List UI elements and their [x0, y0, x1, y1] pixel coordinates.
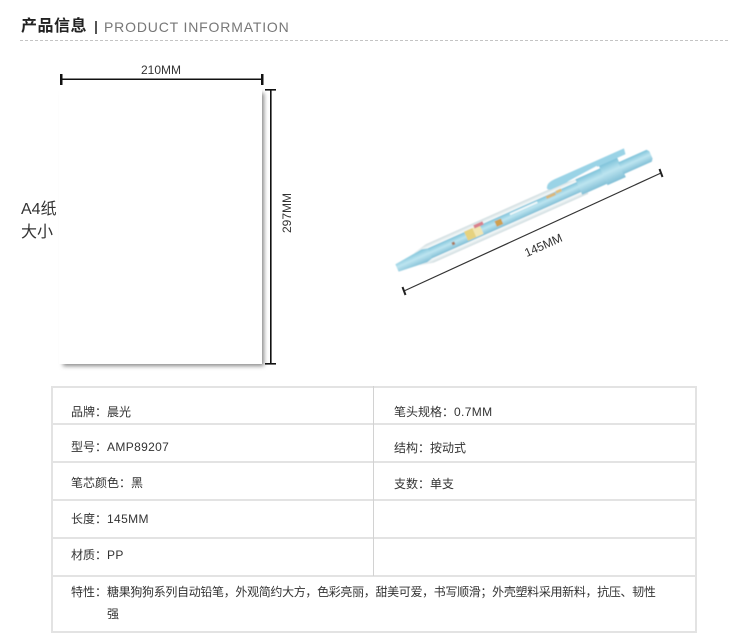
heading: dashed divider [20, 40, 728, 41]
illustration: mechanical pencil with length [395, 148, 664, 296]
width dimension line [60, 74, 264, 85]
heading: separator bar [95, 21, 97, 34]
clear barrel [413, 175, 588, 268]
collar [599, 158, 626, 185]
spec: refill colour: 笔芯颜色：黑 [71, 474, 143, 491]
label: A4 paper size [21, 200, 57, 241]
illustration: A4 paper with dimensions [60, 63, 294, 369]
height label: 297MM [280, 193, 294, 233]
spec: tip size: 笔头规格：0.7MM [394, 403, 492, 420]
spec: features: 特性：糖果狗狗系列自动铅笔，外观简约大方，色彩亮丽，甜美可爱，书写顺滑；外壳塑料采用新料，抗压、韧性 [71, 583, 656, 600]
width label: 210MM [141, 63, 181, 77]
upper body [575, 168, 608, 195]
tip [394, 247, 433, 274]
heading: product information [20, 17, 728, 41]
clip window [566, 166, 598, 183]
spec: quantity: 支数：单支 [394, 475, 454, 492]
barrel pattern [449, 187, 565, 247]
length label: 145MM [522, 231, 565, 260]
label: A4 paper size: 大小 [21, 224, 53, 241]
spec: brand: 品牌：晨光 [71, 403, 131, 420]
label: A4 paper size: A4纸 [21, 201, 57, 218]
height dimension line [265, 89, 276, 365]
clip [545, 148, 627, 191]
blue inner tube [426, 181, 583, 259]
spec: features [71, 583, 656, 621]
heading: English title: PRODUCT INFORMATION [104, 19, 290, 35]
spec: features: 强 [107, 607, 119, 621]
paper sheet with shadow [59, 88, 264, 366]
pencil [390, 139, 655, 277]
spec: length: 长度：145MM [71, 510, 149, 527]
spec: model: 型号：AMP89207 [71, 438, 169, 455]
spec: material: 材质：PP [71, 546, 124, 563]
length dimension line [402, 169, 662, 295]
table: product specifications [51, 386, 697, 633]
push button [618, 149, 654, 174]
heading: Chinese title: 产品信息 [21, 18, 87, 35]
spec: structure: 结构：按动式 [394, 439, 466, 456]
